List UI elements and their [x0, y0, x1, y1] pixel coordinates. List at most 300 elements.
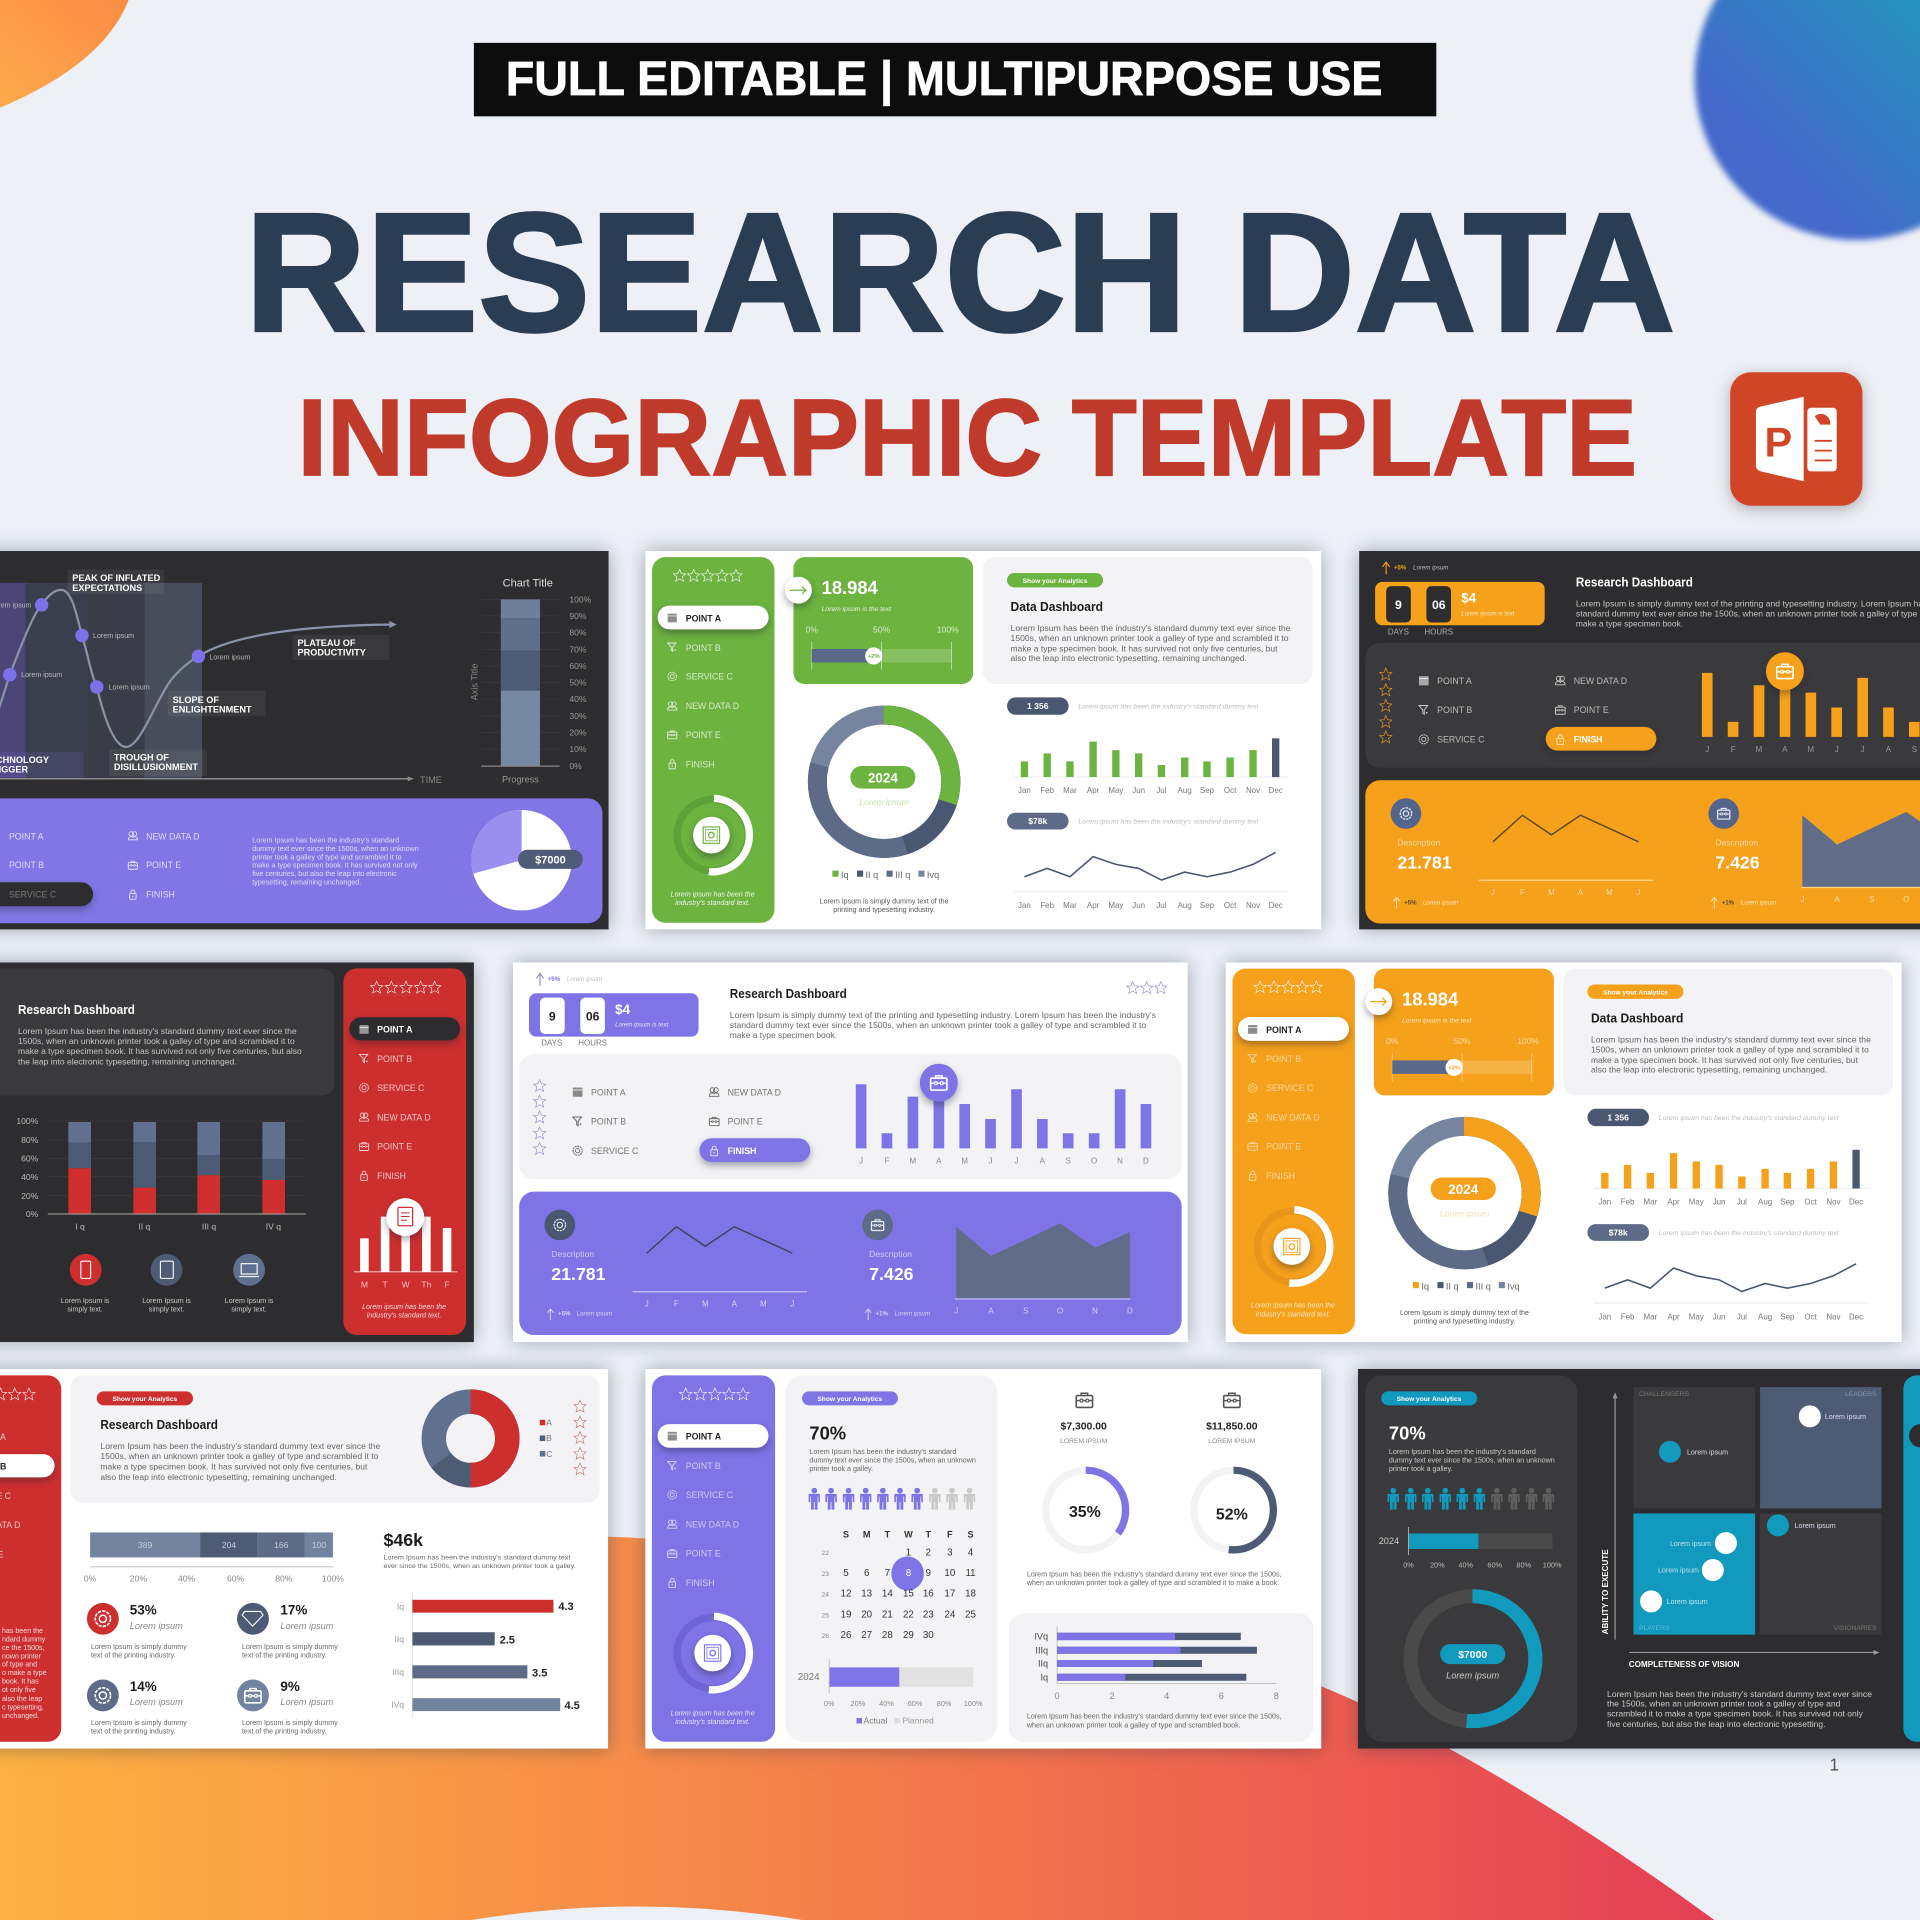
weekly mini bar chart: W: [402, 1280, 411, 1290]
monthly line chart: May: [1689, 1312, 1704, 1321]
calendar: 3: [947, 1548, 953, 1559]
red sidebar, cropped at the left edge: ot only five: [2, 1686, 36, 1694]
sidebar: POINT E: [1266, 1141, 1301, 1151]
two money figures: LOREM IPSUM: [1208, 1438, 1256, 1445]
red sidebar: POINT B: [377, 1054, 412, 1064]
kpi progress card: 0%: [1386, 1036, 1399, 1046]
donut caption: [820, 898, 949, 914]
calendar: 10: [944, 1568, 956, 1579]
red sidebar: industry's standard text.: [367, 1312, 441, 1320]
menu and bar chart card: A: [936, 1156, 942, 1165]
text card: the leap into electronic typesetting, remaining unchanged.: [18, 1057, 237, 1067]
hype cycle phase labels: DISILLUSIONMENT: [114, 762, 198, 772]
monthly bar chart: Jun: [1132, 786, 1145, 795]
menu and bar chart card: SERVICE C: [1437, 735, 1485, 745]
calendar: 9: [926, 1568, 931, 1579]
donut caption: Lorem Ipsum is simply dummy text of the: [820, 898, 949, 906]
monthly line chart: Nov: [1246, 901, 1260, 910]
monthly line chart: Lorem ipsum has been the industry's standard dummy text: [1078, 818, 1259, 825]
monthly line chart: Sep: [1200, 901, 1215, 910]
four percentage stats: [87, 1602, 338, 1736]
purple statistics card: O: [1057, 1306, 1063, 1315]
countdown stat box: DAYS: [1388, 627, 1409, 636]
monthly line chart: Jun: [1132, 901, 1145, 910]
description: Lorem Ipsum is simply dummy text of the printing and typesetting industry. Lorem Ipsum has been the industry's: [730, 1010, 1156, 1020]
purple statistics card: 7.426: [869, 1264, 914, 1284]
stacked horizontal bar: 0%: [84, 1573, 97, 1583]
red sidebar, cropped at the left edge: also the leap: [2, 1695, 42, 1703]
monthly line chart: [1587, 1224, 1869, 1321]
menu and bar chart card: FINISH: [1574, 735, 1603, 745]
people pictogram: [1387, 1488, 1554, 1510]
donut caption: printing and typesetting industry.: [1414, 1318, 1515, 1326]
monthly line chart: Dec: [1269, 901, 1283, 910]
donut legend: III q: [895, 870, 910, 880]
stacked bar chart: chart title: 90%: [569, 611, 587, 621]
sidebar: [1232, 969, 1355, 1334]
monthly bar chart: Dec: [1269, 786, 1283, 795]
text card: make a type specimen book. It has survived not only five centuries, but also: [18, 1046, 302, 1056]
monthly line chart: Aug: [1758, 1312, 1772, 1321]
stacked horizontal bar chart card: 0: [1055, 1691, 1060, 1701]
purple statistics card: Description: [551, 1249, 594, 1259]
banner: full editable: [474, 43, 1436, 116]
text block: typesetting, remaining unchanged.: [252, 879, 361, 887]
purple statistics card: Lorem ipsum: [577, 1311, 612, 1318]
stacked bar chart: chart title: 20%: [569, 728, 587, 738]
stacked horizontal bar: 20%: [130, 1573, 147, 1583]
actual vs planned bar: 60%: [908, 1699, 923, 1708]
monthly bar chart: Mar: [1063, 786, 1077, 795]
horizontal bar chart quarters: [391, 1592, 580, 1718]
menu and bar chart card: M: [961, 1156, 968, 1165]
calendar: 8: [906, 1568, 912, 1579]
monthly bar chart: May: [1108, 786, 1123, 795]
horizontal bar chart quarters: 3.5: [532, 1667, 547, 1679]
description: make a type specimen book.: [730, 1030, 837, 1040]
hype cycle curve: [0, 590, 397, 759]
countdown stat box: Lorem ipsum is text: [1461, 610, 1515, 617]
donut legend: Ivq: [927, 870, 939, 880]
donut legend: III q: [1476, 1281, 1491, 1291]
decorative gradient wave at the bottom: [0, 1535, 1714, 1920]
calendar: [822, 1529, 977, 1641]
stacked horizontal bar chart card: Iq: [1041, 1673, 1048, 1683]
header card: Lorem Ipsum has been the industry's standard dummy text ever since the: [100, 1441, 381, 1451]
monthly bar chart: Oct: [1224, 786, 1237, 795]
monthly bar chart: Jan: [1018, 786, 1031, 795]
ring caption: when an unknown printer took a galley of type and scrambled it to make a book.: [1026, 1578, 1279, 1587]
monthly bar chart: Jun: [1713, 1197, 1725, 1206]
weekly mini bar chart: T: [382, 1280, 388, 1290]
stacked horizontal bar: 100: [312, 1540, 326, 1550]
stacked bar chart: chart title: 40%: [569, 694, 587, 704]
device icons with captions: Lorem Ipsum is: [225, 1297, 274, 1305]
red sidebar: Lorem ipsum has been the: [362, 1303, 446, 1311]
orange statistics card: J: [1491, 888, 1495, 897]
sidebar: POINT B: [1266, 1054, 1301, 1064]
menu and bar chart card: F: [1731, 745, 1736, 754]
menu and bar chart card: POINT A: [591, 1087, 626, 1097]
pie chart with value pill: [471, 810, 583, 910]
menu and bar chart card: A: [1040, 1156, 1046, 1165]
icon: powerpoint logo: P: [1764, 419, 1792, 466]
weekly mini bar chart: [354, 1198, 457, 1290]
stacked horizontal bar: 166: [274, 1540, 289, 1550]
stacked horizontal bar: 80%: [275, 1573, 293, 1583]
donut $7000: Lorem ipsum: [1446, 1671, 1500, 1681]
analytics card with calendar: [786, 1375, 997, 1742]
teal sidebar, cropped at the right edge: [1903, 1375, 1920, 1742]
panel: purple summary band: [0, 798, 602, 923]
menu and bar chart card: N: [1117, 1156, 1123, 1165]
stacked bar chart: chart title: Progress: [502, 774, 539, 784]
trend note: [1382, 562, 1448, 574]
hype cycle phase labels: ENLIGHTENMENT: [173, 705, 252, 715]
red sidebar, cropped at the left edge: A: [0, 1432, 6, 1442]
menu and bar chart card: J: [1014, 1156, 1018, 1165]
orange statistics card: Description: [1715, 838, 1758, 848]
progress rings: 52%: [1216, 1507, 1248, 1524]
2024 progress bar: 100%: [1543, 1560, 1562, 1569]
red sidebar, cropped at the left edge: nown printer: [2, 1653, 42, 1661]
red sidebar: POINT E: [377, 1142, 412, 1152]
orange statistics card: Lorem ipsum: [1741, 899, 1776, 906]
calendar: 24: [822, 1592, 829, 1599]
two money figures: $11,850.00: [1206, 1421, 1258, 1432]
menu and bar chart card: M: [1756, 745, 1762, 754]
stacked horizontal bar: [84, 1532, 344, 1583]
countdown stat box: 9: [549, 1010, 556, 1024]
orange statistics card: J: [1800, 895, 1804, 904]
panel: purple summary band: NEW DATA D: [146, 831, 200, 841]
sidebar: Lorem ipsum has been the: [671, 1710, 755, 1718]
stacked quarterly bar chart: 80%: [21, 1135, 39, 1145]
stacked horizontal bar chart card: Lorem Ipsum has been the industry's standard dummy text ever since the 1500s,: [1027, 1712, 1282, 1721]
donut chart 2024: Lorem ipsum: [859, 797, 909, 807]
data dashboard text card: Data Dashboard: [1591, 1010, 1683, 1025]
device icons with captions: simply text.: [231, 1305, 267, 1313]
stacked bar chart: chart title: 50%: [569, 678, 587, 688]
sidebar: [652, 1375, 775, 1742]
four percentage stats: text of the printing industry.: [242, 1651, 327, 1659]
monthly line chart: Feb: [1040, 901, 1055, 910]
header card: make a type specimen book. It has survived not only five centuries, but: [100, 1461, 368, 1471]
data dashboard text card: also the leap into electronic typesetting, remaining unchanged.: [1011, 653, 1247, 663]
gauge icon: [675, 1615, 751, 1691]
panel: purple summary band: POINT E: [146, 860, 181, 870]
calendar: 22: [903, 1610, 914, 1621]
menu and bar chart card: A: [1782, 745, 1788, 754]
trend note: Lorem ipsum: [1413, 564, 1448, 571]
quadrant chart: VISIONARIES: [1834, 1625, 1877, 1632]
horizontal bar chart quarters: 2.5: [500, 1634, 515, 1646]
monthly line chart: Apr: [1087, 901, 1100, 910]
donut chart 2024: 2024: [868, 770, 898, 785]
data dashboard text card: Show your Analytics: [1603, 989, 1668, 996]
gauge icon: [675, 797, 751, 873]
sidebar: POINT A: [686, 613, 722, 623]
actual vs planned bar: 20%: [851, 1699, 866, 1708]
horizontal bar chart quarters: 4.5: [564, 1700, 580, 1712]
trend note: [536, 973, 602, 986]
data dashboard text card: Lorem Ipsum has been the industry's standard dummy text ever since the: [1591, 1035, 1871, 1045]
kpi progress card: [1365, 969, 1554, 1095]
orange statistics card: +5%: [1404, 899, 1417, 906]
calendar: M: [863, 1529, 871, 1539]
purple statistics card: 21.781: [551, 1264, 606, 1284]
stacked horizontal bar chart card: 8: [1274, 1691, 1279, 1701]
description: make a type specimen book.: [1576, 619, 1683, 629]
sidebar: POINT A: [686, 1432, 722, 1442]
big number $46k: Lorem Ipsum has been the industry's standard dummy text: [384, 1554, 571, 1561]
analytics card: 70%: [1389, 1422, 1426, 1443]
analytics card: [1365, 1375, 1577, 1742]
monthly line chart: Lorem ipsum has been the industry's standard dummy text: [1659, 1230, 1839, 1237]
kpi progress card: 100%: [937, 624, 959, 634]
monthly line chart: Oct: [1804, 1312, 1817, 1321]
four percentage stats: Lorem Ipsum is simply dummy: [242, 1643, 338, 1651]
monthly line chart: $78k: [1028, 816, 1048, 826]
sidebar: NEW DATA D: [686, 1519, 739, 1529]
donut legend: B: [546, 1433, 552, 1443]
orange statistics card: 21.781: [1397, 853, 1452, 873]
menu and bar chart card: J: [859, 1156, 863, 1165]
device icons with captions: [61, 1254, 274, 1313]
monthly bar chart: Lorem ipsum has been the industry's standard dummy text: [1659, 1115, 1839, 1122]
calendar: 29: [903, 1630, 914, 1641]
sidebar: POINT B: [686, 643, 721, 653]
header card: also the leap into electronic typesetting, remaining unchanged.: [100, 1472, 337, 1482]
monthly line chart: Mar: [1063, 901, 1077, 910]
hype cycle phase labels: EXPECTATIONS: [72, 583, 142, 593]
menu and bar chart card: NEW DATA D: [1574, 676, 1627, 686]
heading: Research Dashboard: [1576, 575, 1693, 590]
data dashboard text card: Lorem Ipsum has been the industry's standard dummy text ever since the: [1011, 623, 1291, 633]
purple statistics card: F: [674, 1300, 679, 1309]
calendar: S: [967, 1529, 974, 1539]
pie chart with value pill: $7000: [535, 854, 566, 866]
sidebar: [652, 557, 774, 923]
menu and bar chart card: S: [1912, 745, 1917, 754]
four percentage stats: Lorem Ipsum is simply dummy: [91, 1719, 187, 1727]
text card: Research Dashboard: [18, 1002, 135, 1017]
text block: dummy text ever since the 1500s, when an unknown: [252, 845, 419, 853]
calendar: 4: [968, 1548, 974, 1559]
red sidebar: SERVICE C: [377, 1083, 425, 1093]
countdown stat box: 06: [1432, 598, 1446, 612]
red sidebar, cropped at the left edge: book. It has: [2, 1678, 39, 1686]
panel: purple summary band: POINT A: [9, 831, 44, 841]
panel: white research dashboard with purple accents: [513, 962, 1188, 1342]
stacked quarterly bar chart: 40%: [21, 1172, 39, 1182]
text block: five centuries, but also the leap into electronic: [252, 870, 397, 878]
decorative orange corner shape: [0, 0, 129, 108]
monthly bar chart: Sep: [1200, 786, 1215, 795]
weekly mini bar chart: F: [444, 1280, 450, 1290]
trend note: +5%: [548, 976, 561, 983]
stacked quarterly bar chart: 20%: [21, 1191, 39, 1201]
countdown stat box: HOURS: [1424, 627, 1453, 636]
quadrant chart: Lorem ipsum: [1825, 1413, 1866, 1421]
red sidebar: FINISH: [377, 1171, 406, 1181]
stacked quarterly bar chart: IV q: [266, 1221, 281, 1231]
stacked bar chart: chart title: Chart Title: [503, 578, 553, 590]
sidebar: industry's standard text.: [675, 1718, 750, 1726]
2024 progress bar: 0%: [1403, 1560, 1414, 1569]
four percentage stats: Lorem ipsum: [280, 1697, 334, 1707]
kpi progress card: Lorem ipsum is the text: [822, 606, 892, 613]
four percentage stats: Lorem Ipsum is simply dummy: [91, 1643, 187, 1651]
kpi progress card: +2%: [868, 654, 880, 660]
text block: [252, 836, 419, 887]
monthly line chart: Jun: [1713, 1312, 1725, 1321]
orange statistics card: A: [1834, 895, 1840, 904]
two money figures: $7,300.00: [1061, 1421, 1107, 1432]
gauge icon: [1255, 1209, 1331, 1285]
header card: [70, 1375, 600, 1503]
hype cycle curve: Lorem ipsum: [21, 671, 62, 679]
actual vs planned bar: Actual: [864, 1715, 887, 1725]
calendar: 23: [822, 1571, 829, 1578]
description: standard dummy text ever since the 1500s, when an unknown printer took a galley of type and scrambled it to: [730, 1020, 1146, 1030]
sidebar: POINT B: [686, 1461, 721, 1471]
purple statistics card: Lorem ipsum: [895, 1311, 930, 1318]
calendar: W: [904, 1529, 913, 1539]
actual vs planned bar: 80%: [937, 1699, 952, 1708]
menu and bar chart card: J: [1835, 745, 1839, 754]
red sidebar: POINT A: [377, 1025, 413, 1035]
stacked quarterly bar chart: 0%: [26, 1209, 39, 1219]
stacked horizontal bar chart card: IIq: [1038, 1659, 1048, 1669]
donut chart 2024: Lorem ipsum: [1440, 1209, 1489, 1219]
calendar: 30: [923, 1630, 934, 1641]
monthly line chart: Mar: [1644, 1312, 1658, 1321]
donut legend: A: [546, 1417, 552, 1427]
red sidebar, cropped at the left edge: c typesetting,: [2, 1703, 44, 1711]
sidebar: NEW DATA D: [686, 701, 739, 711]
donut legend: II q: [1446, 1281, 1459, 1291]
orange statistics card: M: [1548, 888, 1555, 897]
orange statistics card: A: [1578, 888, 1584, 897]
stacked bar chart: chart title: 0%: [569, 761, 582, 771]
analytics card with calendar: dummy text ever since the 1500s, when an unknown: [809, 1457, 976, 1465]
monthly line chart: Oct: [1224, 901, 1237, 910]
panel: dark dashboard with teal accents: [1358, 1369, 1920, 1749]
2024 progress bar: 2024: [1379, 1536, 1399, 1546]
calendar: 20: [861, 1610, 873, 1621]
monthly line chart: $78k: [1609, 1228, 1628, 1238]
purple statistics card: N: [1092, 1306, 1098, 1315]
red sidebar, cropped at the left edge: o make a type: [2, 1669, 47, 1677]
trend note: +5%: [1394, 564, 1407, 571]
purple statistics card: S: [1023, 1306, 1028, 1315]
monthly bar chart: Lorem ipsum has been the industry's standard dummy text: [1078, 703, 1259, 710]
monthly line chart: [1007, 813, 1288, 910]
analytics card with calendar: Lorem Ipsum has been the industry's standard: [809, 1448, 956, 1456]
donut caption: [1400, 1309, 1529, 1326]
countdown stat box: $4: [615, 1002, 631, 1017]
calendar: 11: [965, 1568, 976, 1579]
donut $7000: $7000: [1458, 1650, 1487, 1661]
menu and bar chart card: A: [1886, 745, 1892, 754]
progress rings: [1046, 1470, 1273, 1550]
calendar: 2: [926, 1548, 931, 1559]
quadrant description: Lorem Ipsum has been the industry's standard dummy text ever since: [1607, 1689, 1872, 1699]
monthly bar chart: Nov: [1246, 786, 1260, 795]
calendar: 25: [822, 1613, 829, 1620]
text card: [0, 968, 334, 1096]
calendar: 14: [882, 1589, 893, 1600]
calendar: 15: [903, 1589, 914, 1600]
calendar: 26: [822, 1633, 829, 1640]
quadrant chart: Lorem ipsum: [1687, 1448, 1728, 1456]
countdown stat box: DAYS: [541, 1039, 562, 1048]
kpi progress card: 50%: [1453, 1036, 1471, 1046]
stacked bar chart: chart title: 80%: [569, 628, 587, 638]
hype cycle phase labels: PLATEAU OF: [298, 638, 356, 648]
hype cycle phase bands: [0, 583, 202, 779]
four percentage stats: text of the printing industry.: [91, 1651, 176, 1659]
quadrant chart: Lorem ipsum: [1795, 1522, 1836, 1530]
monthly bar chart: 1 356: [1607, 1112, 1629, 1122]
purple statistics card: A: [732, 1300, 738, 1309]
purple statistics card: Description: [869, 1249, 912, 1259]
weekly mini bar chart: Th: [421, 1280, 432, 1290]
purple statistics card: J: [954, 1306, 958, 1315]
panel: white analytics dashboard with purple sidebar: [645, 1369, 1321, 1749]
calendar: T: [885, 1529, 891, 1539]
countdown stat box: Lorem ipsum is text: [615, 1022, 668, 1029]
stacked horizontal bar chart card: IIIq: [1035, 1646, 1048, 1656]
countdown stat box: $4: [1461, 590, 1477, 605]
text card: 1500s, when an unknown printer took a galley of type and scrambled it to: [18, 1036, 295, 1046]
header card: Research Dashboard: [100, 1417, 218, 1432]
monthly bar chart: Feb: [1040, 786, 1055, 795]
sidebar: POINT E: [686, 730, 721, 740]
rating stars: [574, 1400, 586, 1475]
subtitle: infographic template: INFOGRAPHIC TEMPLATE: [298, 377, 1637, 499]
panel: dark research dashboard with red sidebar: [0, 962, 474, 1342]
time axis: TIME: [420, 775, 442, 785]
donut legend: [540, 1417, 552, 1459]
panel: hype cycle dark slide: [0, 551, 609, 929]
donut legend: Iq: [1421, 1281, 1429, 1291]
page number: 1: [1830, 1755, 1839, 1775]
orange statistics card: Description: [1397, 838, 1440, 848]
red sidebar, cropped at the left edge: has been the: [2, 1627, 43, 1635]
hype cycle curve: Lorem ipsum: [209, 654, 250, 662]
countdown stat box: HOURS: [578, 1039, 607, 1048]
quadrant chart: CHALLENGERS: [1639, 1391, 1690, 1398]
donut chart 2024: 2024: [1448, 1182, 1479, 1197]
donut legend: [832, 870, 939, 880]
calendar: 1: [906, 1548, 911, 1559]
panel: purple summary band: FINISH: [146, 890, 175, 900]
actual vs planned bar: 0%: [824, 1699, 835, 1708]
kpi progress card: 100%: [1517, 1036, 1539, 1046]
donut legend: Iq: [841, 870, 849, 880]
orange statistics card: [1365, 780, 1920, 924]
analytics card: Show your Analytics: [1397, 1396, 1462, 1403]
sidebar: Lorem ipsum has been the: [1251, 1302, 1335, 1310]
stacked horizontal bar: 60%: [227, 1573, 245, 1583]
four percentage stats: text of the printing industry.: [91, 1728, 176, 1736]
calendar: 27: [861, 1630, 872, 1641]
donut legend: C: [546, 1449, 552, 1459]
purple statistics card: J: [645, 1300, 649, 1309]
panel: orange data dashboard: [1226, 962, 1902, 1342]
